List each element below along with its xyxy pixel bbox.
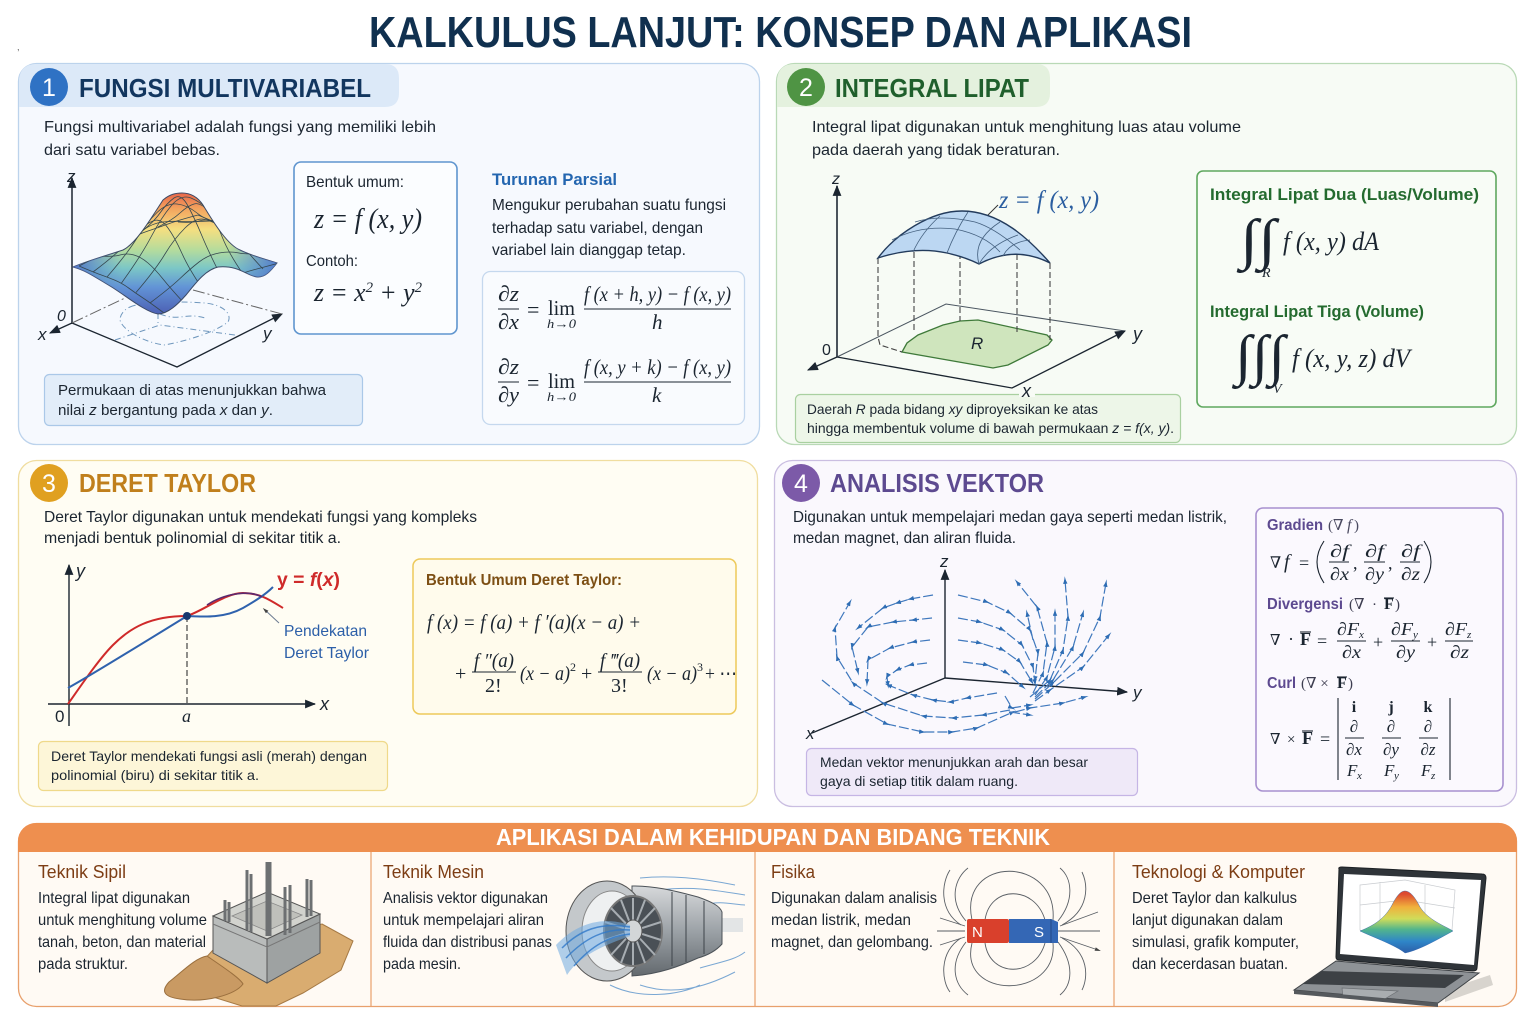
- application: fisika: magnet, dan gelombang.: [771, 934, 933, 951]
- partial derivative formulas: f (x, y + k) − f (x, y): [584, 355, 731, 379]
- heading: ANALISIS VEKTOR: [830, 468, 1044, 498]
- application: teknologi dan komputer: [1132, 862, 1493, 1007]
- caption: [806, 748, 1138, 796]
- divergence formula: ·: [1288, 629, 1294, 649]
- gradient formula: ,: [1353, 553, 1358, 573]
- curl formula: ∂x: [1346, 740, 1362, 759]
- divergence formula: ∂F: [1337, 619, 1360, 639]
- taylor formula box: (x − a): [520, 663, 570, 685]
- caption: [38, 742, 388, 790]
- divergence formula: ∂F: [1445, 619, 1468, 639]
- gradient formula: =: [1299, 553, 1309, 573]
- application: teknik mesin: untuk mempelajari aliran: [383, 912, 544, 929]
- volume diagram: R: [971, 334, 983, 353]
- divergence formula: =: [1317, 631, 1327, 651]
- icon: concrete foundation: [165, 862, 353, 1006]
- curl formula: =: [1320, 729, 1330, 749]
- gradient formula: ∂y: [1365, 564, 1384, 584]
- taylor graph: a: [182, 706, 191, 726]
- integral formulas box: [1197, 171, 1496, 407]
- vector field diagram: [805, 552, 1143, 743]
- divergence formula: Divergensi: [1267, 596, 1343, 613]
- curl formula: z: [1430, 770, 1436, 782]
- taylor graph: y: [74, 561, 86, 581]
- divergence formula: +: [1373, 632, 1383, 652]
- intro text: [812, 119, 1241, 159]
- x axis label: x: [1021, 381, 1032, 401]
- curl formula: y: [1393, 770, 1399, 782]
- panel: integral lipat: [776, 64, 1516, 444]
- general form box: Contoh:: [306, 253, 358, 270]
- partial derivative formulas: ∂z: [498, 281, 519, 306]
- divergence formula: [1267, 596, 1473, 662]
- volume diagram: 0: [822, 342, 831, 359]
- integral formulas box: Integral Lipat Dua (Luas/Volume): [1210, 185, 1479, 204]
- volume diagram: z: [831, 171, 840, 188]
- application: fisika: Digunakan dalam analisis: [771, 890, 937, 907]
- partial derivative text: Turunan Parsial: [492, 170, 617, 189]
- taylor formula box: (x − a): [647, 663, 697, 685]
- integral formulas box: f (x, y) dA: [1283, 227, 1379, 256]
- curl formula: k: [1424, 699, 1433, 716]
- intro text: dari satu variabel bebas.: [44, 142, 220, 159]
- gradient formula: f: [1284, 551, 1292, 573]
- application: teknologi dan komputer: simulasi, grafik komputer,: [1132, 934, 1299, 951]
- application: teknik mesin: Teknik Mesin: [383, 862, 484, 882]
- application: teknologi dan komputer: Teknologi & Komputer: [1132, 862, 1305, 882]
- curl formula: F: [1302, 728, 1313, 748]
- taylor formula box: f ‴(a): [600, 650, 640, 672]
- taylor formula box: [413, 559, 737, 714]
- taylor graph: Pendekatan: [284, 623, 367, 640]
- surface plot: x: [37, 325, 47, 344]
- intro text: Deret Taylor digunakan untuk mendekati fungsi yang kompleks: [44, 509, 477, 526]
- heading: INTEGRAL LIPAT: [835, 73, 1029, 103]
- application: teknologi dan komputer: dan kecerdasan buatan.: [1132, 956, 1288, 973]
- integral formulas box: Integral Lipat Tiga (Volume): [1210, 302, 1424, 321]
- gradient formula: ,: [1388, 553, 1392, 573]
- curl formula: F: [1383, 761, 1395, 780]
- intro text: pada daerah yang tidak beraturan.: [812, 142, 1060, 159]
- caption: hingga membentuk volume di bawah permukaan z = f(x, y).: [807, 420, 1174, 436]
- surface plot: 0: [57, 308, 66, 325]
- gradient formula: f: [1347, 517, 1354, 534]
- taylor graph: [48, 561, 370, 726]
- curl formula: ∇: [1270, 732, 1280, 748]
- partial derivative formulas: ∂z: [498, 354, 519, 379]
- application: teknik sipil: pada struktur.: [38, 956, 128, 973]
- caption: nilai z bergantung pada x dan y.: [58, 403, 273, 419]
- taylor formula box: Bentuk Umum Deret Taylor:: [426, 572, 622, 589]
- banner: [18, 823, 1517, 852]
- divergence formula: F: [1300, 629, 1311, 649]
- partial derivative formulas: =: [527, 370, 539, 395]
- gradient formula: ∂f: [1401, 541, 1424, 561]
- divergence formula: ): [1395, 597, 1400, 613]
- curl formula: i: [1352, 699, 1357, 716]
- divergence formula: +: [1427, 632, 1437, 652]
- gradient formula: ): [1354, 518, 1359, 534]
- partial derivative text: terhadap satu variabel, dengan: [492, 220, 703, 237]
- gradient formula: ∇: [1270, 555, 1281, 572]
- divergence formula: ∂x: [1342, 642, 1361, 662]
- intro text: [793, 509, 1227, 547]
- icon: magnet field: [937, 868, 1100, 995]
- application: teknik mesin: pada mesin.: [383, 956, 461, 973]
- general form box: [294, 162, 457, 334]
- vector field diagram: x: [805, 724, 815, 743]
- heading: DERET TAYLOR: [79, 468, 256, 498]
- general form box: z = x: [314, 278, 366, 307]
- general form box: z = f (x, y): [313, 204, 422, 235]
- taylor formula box: f ″(a): [474, 650, 514, 672]
- intro text: [44, 119, 436, 159]
- curl formula: ∂y: [1383, 740, 1399, 759]
- application: teknik mesin: fluida dan distribusi panas: [383, 934, 552, 951]
- icon: magnet field: S: [1034, 924, 1044, 941]
- partial derivative formulas: lim: [548, 369, 575, 393]
- general form box: 2: [366, 280, 373, 296]
- curl formula: [1267, 675, 1450, 782]
- divergence formula: F: [1384, 596, 1394, 613]
- caption: [796, 394, 1180, 442]
- partial derivative formulas: h: [652, 310, 662, 334]
- curl formula: ∂: [1424, 717, 1432, 736]
- section number badge: 3: [42, 470, 56, 498]
- divergence formula: ∂z: [1450, 642, 1469, 662]
- surface plot: z: [66, 167, 76, 186]
- partial derivative formulas: [482, 272, 744, 424]
- caption: Deret Taylor mendekati fungsi asli (merah) dengan: [51, 748, 367, 764]
- panel: aplikasi: [18, 823, 1517, 1007]
- intro text: menjadi bentuk polinomial di sekitar titik a.: [44, 530, 341, 547]
- curl formula: F: [1420, 761, 1432, 780]
- general form box: Bentuk umum:: [306, 174, 404, 191]
- gradient formula: ∂f: [1330, 541, 1353, 561]
- panel: deret taylor: [18, 460, 758, 806]
- application: fisika: medan listrik, medan: [771, 912, 911, 929]
- divergence formula: ∂F: [1391, 619, 1414, 639]
- partial derivative formulas: h→0: [547, 317, 577, 331]
- intro text: Integral lipat digunakan untuk menghitung luas atau volume: [812, 119, 1241, 136]
- caption: Permukaan di atas menunjukkan bahwa: [58, 383, 327, 399]
- curl formula: ∂z: [1420, 740, 1436, 759]
- partial derivative formulas: ∂y: [498, 382, 519, 407]
- taylor formula box: 3: [697, 660, 703, 674]
- curl formula: ): [1348, 676, 1353, 692]
- integral formulas box: ∫∫∫: [1232, 325, 1289, 390]
- application: fisika: Fisika: [771, 862, 816, 882]
- volume diagram: [808, 171, 1143, 388]
- caption: gaya di setiap titik dalam ruang.: [820, 773, 1018, 789]
- icon: laptop: [1294, 867, 1493, 1007]
- gradient formula: [1267, 517, 1431, 584]
- section number badge: [782, 464, 820, 502]
- intro text: [44, 509, 477, 547]
- taylor graph: x: [319, 694, 330, 714]
- section number badge: [787, 68, 825, 106]
- surface plot: y: [262, 324, 273, 343]
- curl formula: F: [1346, 761, 1358, 780]
- application: teknik sipil: Teknik Sipil: [38, 862, 126, 882]
- heading: FUNGSI MULTIVARIABEL: [79, 73, 371, 103]
- intro text: Fungsi multivariabel adalah fungsi yang memiliki lebih: [44, 119, 436, 136]
- general form box: + y: [373, 278, 415, 307]
- section number badge: [30, 68, 68, 106]
- divergence formula: y: [1412, 629, 1418, 641]
- volume diagram: z = f (x, y): [998, 187, 1099, 214]
- curl formula: F: [1337, 675, 1347, 692]
- title: KALKULUS LANJUT: KONSEP DAN APLIKASI: [369, 8, 1192, 57]
- taylor formula box: f (x) = f (a) + f ′(a)(x − a) +: [427, 610, 641, 634]
- application: teknik sipil: untuk menghitung volume: [38, 912, 207, 929]
- gradient formula: ∂x: [1330, 564, 1349, 584]
- taylor formula box: 2!: [485, 675, 502, 697]
- general form box: 2: [415, 280, 422, 296]
- icon: magnet field: N: [972, 924, 983, 941]
- surface plot: [37, 167, 283, 367]
- volume diagram: y: [1131, 324, 1143, 344]
- panel: fungsi multivariabel: [18, 64, 760, 444]
- taylor graph: Deret Taylor: [284, 645, 370, 662]
- curl formula: (∇ ×: [1301, 676, 1329, 692]
- stray mark: ,: [17, 42, 20, 52]
- section number badge: 4: [794, 470, 808, 498]
- section number badge: [30, 464, 68, 502]
- partial derivative formulas: h→0: [547, 390, 577, 404]
- integral formulas box: V: [1273, 382, 1283, 397]
- gradient formula: Gradien: [1267, 517, 1323, 534]
- section number badge: 1: [42, 74, 56, 102]
- application: teknik mesin: Analisis vektor digunakan: [383, 890, 548, 907]
- application: teknik sipil: [38, 862, 353, 1006]
- curl formula: ∂: [1350, 717, 1358, 736]
- gradient formula: (∇: [1328, 518, 1343, 534]
- divergence formula: x: [1358, 629, 1364, 641]
- caption: [44, 374, 362, 426]
- vector field diagram: z: [939, 552, 949, 571]
- taylor formula box: + ⋯: [705, 663, 737, 685]
- application: teknologi dan komputer: lanjut digunakan dalam: [1132, 912, 1283, 929]
- application: teknik mesin: [383, 862, 745, 994]
- banner: APLIKASI DALAM KEHIDUPAN DAN BIDANG TEKNIK: [496, 824, 1050, 850]
- vector operators box: [1256, 508, 1503, 791]
- curl formula: ∂: [1387, 717, 1395, 736]
- section number badge: 2: [799, 74, 813, 102]
- gradient formula: ∂z: [1401, 564, 1420, 584]
- icon: jet engine: [556, 877, 745, 994]
- intro text: medan magnet, dan aliran fluida.: [793, 530, 1016, 547]
- intro text: Digunakan untuk mempelajari medan gaya seperti medan listrik,: [793, 509, 1227, 526]
- curl formula: j: [1387, 699, 1394, 716]
- divergence formula: (∇ ·: [1349, 597, 1377, 613]
- taylor formula box: +: [455, 663, 466, 685]
- application: teknologi dan komputer: Deret Taylor dan kalkulus: [1132, 890, 1297, 907]
- taylor formula box: 2: [570, 660, 576, 674]
- partial derivative formulas: =: [527, 297, 539, 322]
- panel: analisis vektor: [774, 460, 1516, 806]
- divergence formula: ∂y: [1396, 642, 1415, 662]
- integral formulas box: R: [1261, 266, 1271, 281]
- caption: Medan vektor menunjukkan arah dan besar: [820, 754, 1088, 770]
- application: teknik sipil: tanah, beton, dan material: [38, 934, 206, 951]
- curl formula: x: [1356, 770, 1362, 782]
- divergence formula: z: [1466, 629, 1472, 641]
- partial derivative text: variabel lain dianggap tetap.: [492, 242, 686, 259]
- vector field diagram: y: [1132, 683, 1143, 702]
- curl formula: ×: [1287, 732, 1295, 748]
- partial derivative formulas: ∂x: [498, 309, 519, 334]
- curl formula: Curl: [1267, 675, 1296, 692]
- application: fisika: [771, 862, 1100, 995]
- divergence formula: ∇: [1270, 633, 1280, 649]
- caption: Daerah R pada bidang xy diproyeksikan ke atas: [807, 401, 1098, 417]
- partial derivative formulas: lim: [548, 296, 575, 320]
- partial derivative text: [492, 170, 726, 259]
- taylor graph: 0: [55, 707, 64, 726]
- caption: polinomial (biru) di sekitar titik a.: [51, 767, 259, 783]
- partial derivative formulas: k: [652, 383, 662, 407]
- application: teknik sipil: Integral lipat digunakan: [38, 890, 190, 907]
- gradient formula: ∂f: [1365, 541, 1388, 561]
- integral formulas box: f (x, y, z) dV: [1292, 344, 1413, 373]
- partial derivative text: Mengukur perubahan suatu fungsi: [492, 197, 726, 214]
- taylor graph: y = f(x): [277, 570, 340, 591]
- taylor formula box: +: [581, 663, 592, 685]
- x axis label: [1019, 381, 1035, 401]
- partial derivative formulas: f (x + h, y) − f (x, y): [584, 282, 731, 306]
- taylor formula box: 3!: [611, 675, 628, 697]
- integral formulas box: ∫∫: [1236, 209, 1280, 274]
